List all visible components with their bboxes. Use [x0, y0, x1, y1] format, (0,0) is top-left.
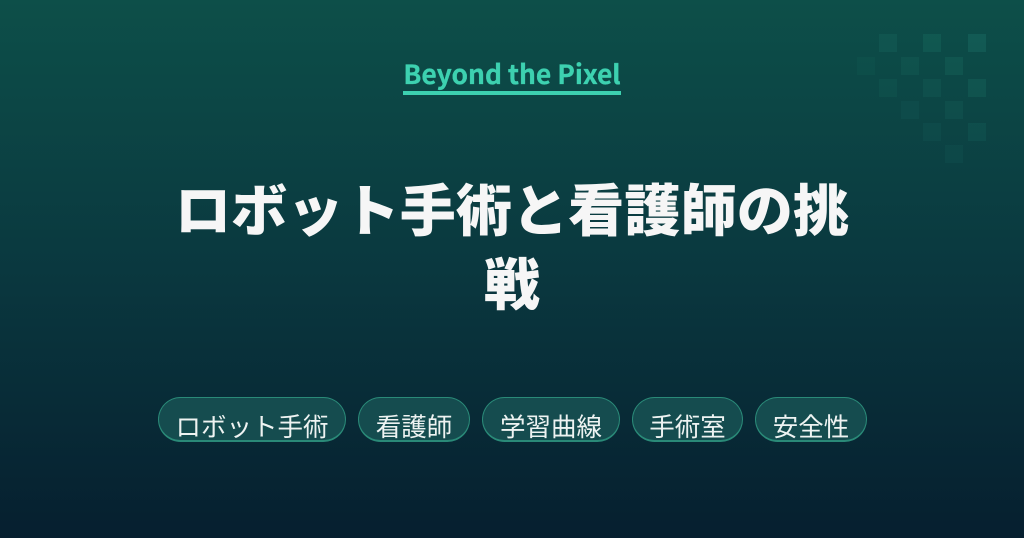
tag: 手術室: [632, 396, 743, 442]
tag: 学習曲線: 学習曲線: [500, 406, 602, 444]
decorative pixel grid: [879, 34, 986, 141]
tag: 看護師: 看護師: [376, 406, 452, 444]
tag: 看護師: [358, 396, 470, 442]
tag: 安全性: 安全性: [773, 406, 849, 444]
title: ロボット手術と看護師の挑: [175, 167, 849, 248]
tag: ロボット手術: [158, 396, 346, 442]
tag: 手術室: 手術室: [649, 406, 726, 444]
title: [175, 167, 849, 322]
brand heading: Beyond the Pixel: Beyond the Pixel: [403, 53, 621, 92]
title: 戦: [484, 241, 540, 322]
tag: ロボット手術: ロボット手術: [175, 406, 328, 444]
tag: 安全性: [755, 396, 867, 442]
tag: 学習曲線: [482, 396, 620, 442]
